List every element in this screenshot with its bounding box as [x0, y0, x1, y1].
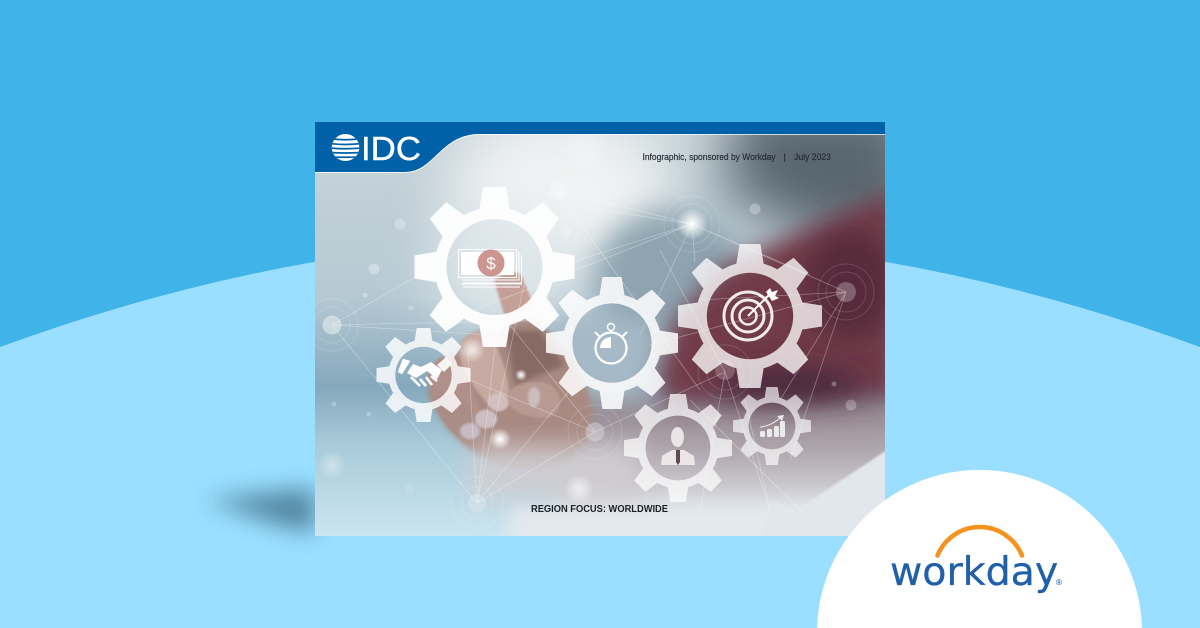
thumb [507, 382, 560, 418]
photo: hand pointing at gear [428, 272, 640, 500]
gear: person [624, 394, 732, 502]
icon: growth chart [760, 415, 785, 437]
icon: handshake [398, 357, 452, 386]
index finger [494, 272, 534, 315]
orange arc [938, 527, 1022, 556]
network lines [332, 190, 846, 520]
icon: target and arrow [724, 288, 779, 340]
tab edge highlight [315, 134, 885, 172]
logo: Workday [890, 527, 1063, 595]
little finger [438, 412, 454, 433]
palm and back of hand [428, 318, 592, 470]
icon: money stack [458, 250, 522, 287]
network nodes and glows [315, 196, 874, 512]
ring finger [426, 356, 478, 412]
IDC wordmark: IDC [361, 130, 421, 167]
icon: IDC striped globe [332, 134, 360, 161]
cover photo background [315, 134, 885, 536]
sponsor line: Infographic, sponsored by Workday [642, 152, 776, 162]
second knuckle finger [459, 332, 509, 411]
gear: target [678, 244, 822, 388]
sponsor line: | [784, 152, 786, 162]
icon: money stack: $ [486, 254, 496, 273]
icon: business person [661, 427, 695, 465]
report cover shadow [205, 488, 315, 533]
logo: IDC [332, 134, 420, 161]
wordmark: workday [890, 549, 1058, 595]
sponsor line: July 2023 [794, 152, 831, 162]
header band with IDC tab [315, 122, 885, 172]
hand fade [470, 445, 640, 500]
gear: money [414, 187, 574, 347]
background: light blue curved hill [0, 237, 1200, 628]
white logo circle [817, 470, 1142, 628]
gear: handshake [376, 328, 470, 422]
panel: report cover [315, 122, 885, 536]
gear: stopwatch [546, 277, 678, 409]
registered mark: ® [1055, 578, 1063, 587]
gear: growth chart [733, 387, 811, 465]
region focus label: REGION FOCUS: WORLDWIDE [531, 504, 669, 515]
icon: stopwatch [595, 324, 627, 364]
